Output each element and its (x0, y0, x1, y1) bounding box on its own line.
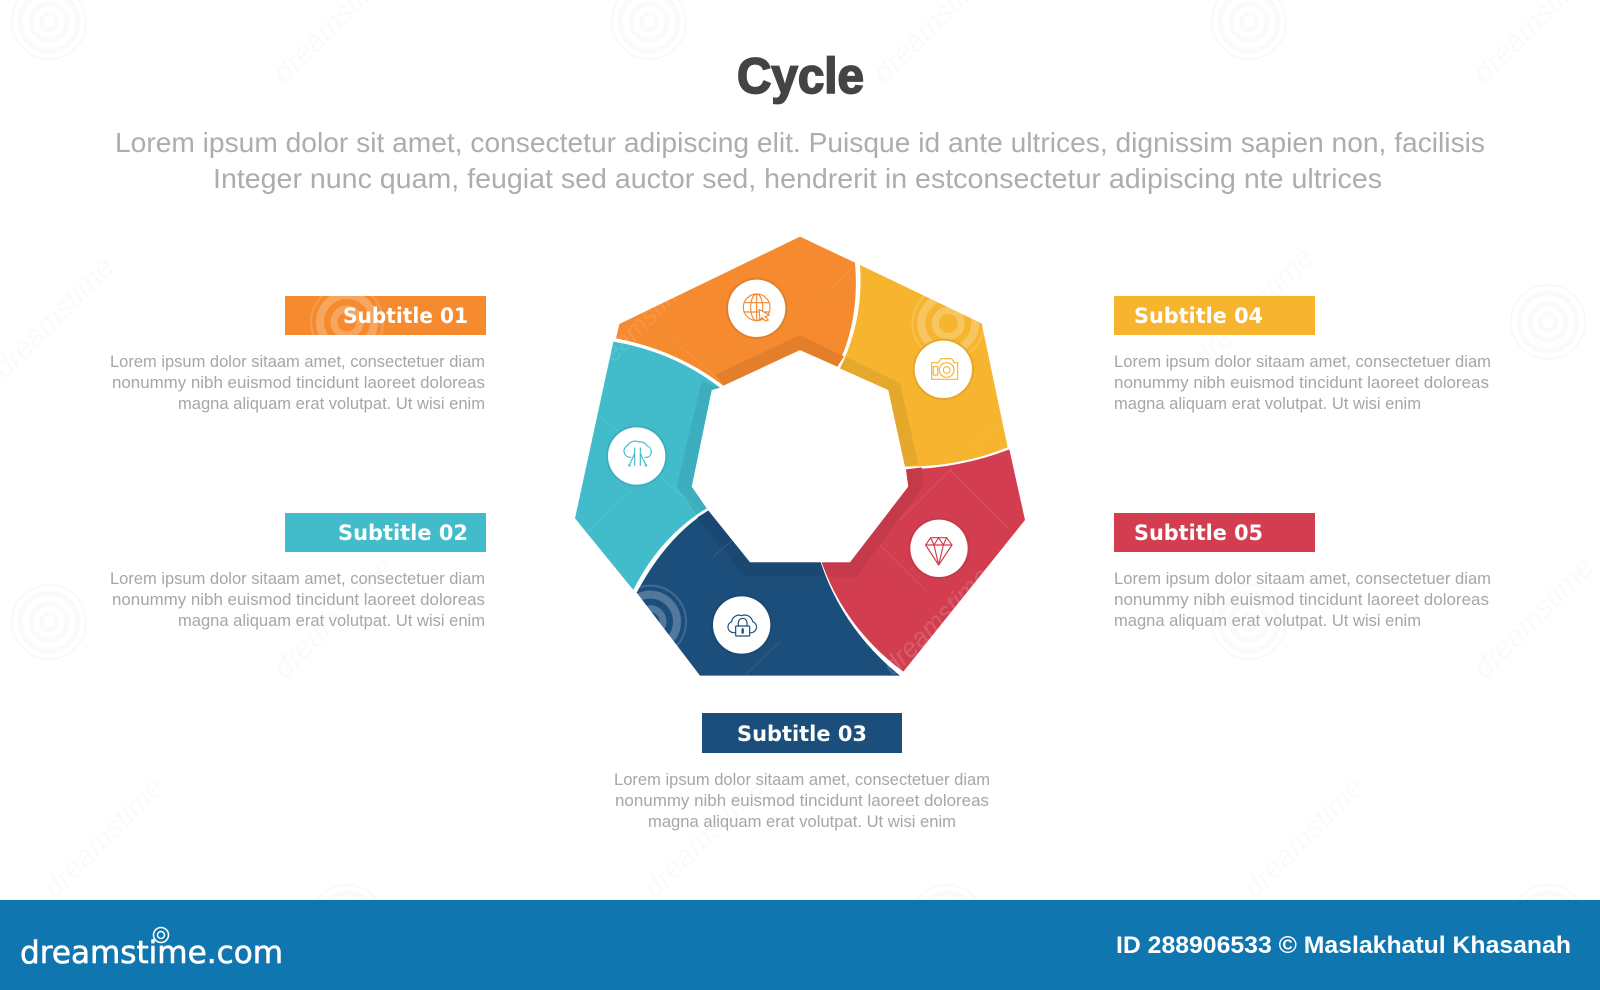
panel: subtitle 05: magna aliquam erat volutpat. Ut wisi enim (1114, 612, 1421, 630)
segment: orange (616, 237, 856, 386)
icon: camera (913, 339, 974, 400)
icon: globe with cursor (726, 278, 787, 339)
watermark background: dreamstime (1187, 241, 1321, 375)
watermark background: dreamstime (1237, 771, 1371, 905)
panel: subtitle 02 (110, 513, 486, 630)
heptagon cycle diagram (575, 237, 1025, 681)
intro text (115, 127, 1485, 194)
footer bar (0, 900, 1600, 990)
panel: subtitle 02: nonummy nibh euismod tincidunt laoreet doloreas (112, 591, 485, 609)
panel: subtitle 01: Lorem ipsum dolor sitaam amet, consectetuer diam (110, 353, 485, 371)
panel: subtitle 04: Subtitle 04 (1134, 304, 1263, 328)
watermark background: dreamstime (37, 771, 171, 905)
icon: diamond (908, 518, 970, 579)
panel: subtitle 03: Lorem ipsum dolor sitaam amet, consectetuer diam (614, 771, 990, 789)
icon: cloud with lock (711, 594, 772, 656)
segment: teal (575, 342, 720, 590)
panel: subtitle 05 (1114, 513, 1491, 630)
panel: subtitle 04: nonummy nibh euismod tincidunt laoreet doloreas (1114, 374, 1489, 392)
intro text: Lorem ipsum dolor sit amet, consectetur adipiscing elit. Puisque id ante ultrices, dignissim sapien non, facilisis (115, 127, 1485, 158)
panel: subtitle 05: Lorem ipsum dolor sitaam amet, consectetuer diam (1114, 570, 1491, 588)
panel: subtitle 01 (110, 286, 486, 413)
panel: subtitle 05: nonummy nibh euismod tincidunt laoreet doloreas (1114, 591, 1489, 609)
panel: subtitle 01: magna aliquam erat volutpat. Ut wisi enim (178, 395, 485, 413)
icon: cloud with nodes (606, 425, 667, 487)
panel: subtitle 03: magna aliquam erat volutpat. Ut wisi enim (648, 813, 956, 831)
watermark background: dreamstime (637, 771, 771, 905)
segment: red (822, 449, 1025, 672)
intro text: Integer nunc quam, feugiat sed auctor sed, hendrerit in estconsectetur adipiscing nte ultrices (213, 163, 1382, 194)
footer credit: ID 288906533 © Maslakhatul Khasanah (1116, 932, 1571, 959)
title: Cycle (737, 48, 864, 104)
panel: subtitle 01: Subtitle 01 (343, 304, 468, 328)
segment: navy (637, 511, 900, 676)
watermark background: dreamstime (1467, 551, 1600, 685)
watermark over segments (580, 265, 1008, 681)
panel: subtitle 01: nonummy nibh euismod tincidunt laoreet doloreas (112, 374, 485, 392)
panel: subtitle 05: Subtitle 05 (1134, 521, 1263, 545)
panel: subtitle 04: Lorem ipsum dolor sitaam amet, consectetuer diam (1114, 353, 1491, 371)
panel: subtitle 03: Subtitle 03 (737, 722, 867, 746)
panel: subtitle 02: Lorem ipsum dolor sitaam amet, consectetuer diam (110, 570, 485, 588)
watermark over segments: dreamstime (580, 265, 699, 384)
panel: subtitle 03 (614, 713, 990, 831)
segment: yellow (840, 265, 1008, 467)
panel: subtitle 04: magna aliquam erat volutpat. Ut wisi enim (1114, 395, 1421, 413)
watermark background: dreamstime (267, 551, 401, 685)
panel: subtitle 02: Subtitle 02 (338, 521, 468, 545)
footer logo: dreamstime.com (20, 935, 283, 971)
panel: subtitle 03: nonummy nibh euismod tincidunt laoreet doloreas (615, 792, 989, 810)
watermark over segments: dreamstime (876, 561, 996, 681)
panel: subtitle 04 (1114, 296, 1491, 413)
panel: subtitle 02: magna aliquam erat volutpat. Ut wisi enim (178, 612, 485, 630)
